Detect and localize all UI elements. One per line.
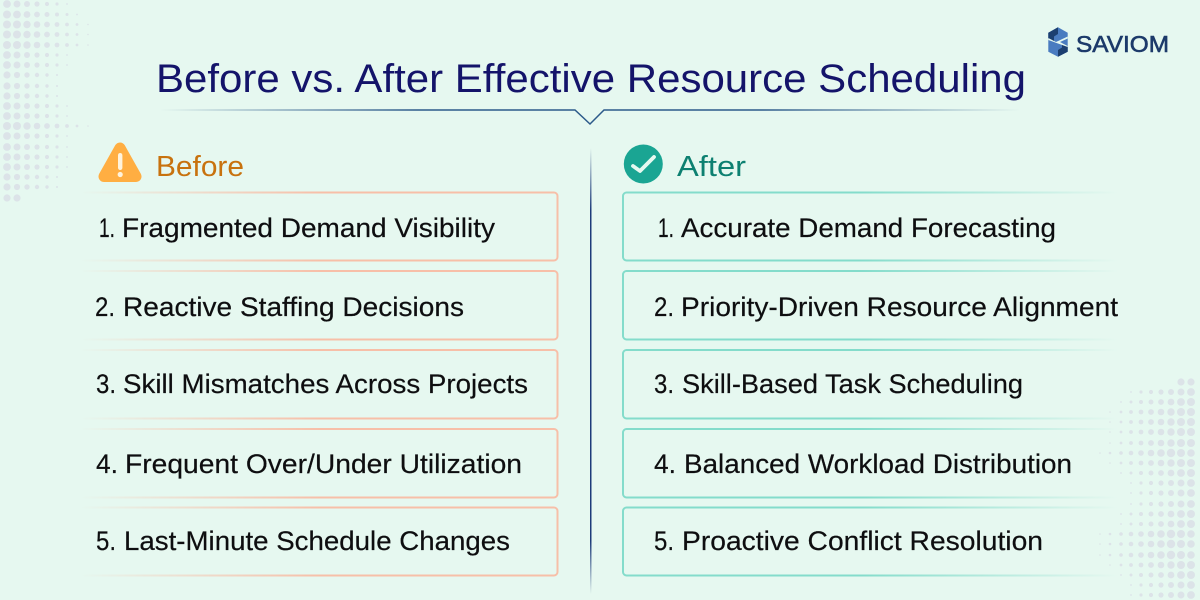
before item 2 xyxy=(80,271,558,340)
before item 1: Fragmented Demand Visibility xyxy=(122,213,496,243)
after item 3: Skill-Based Task Scheduling xyxy=(682,369,1023,399)
logo: Saviom xyxy=(1048,27,1169,57)
after item 4: Balanced Workload Distribution xyxy=(684,449,1072,479)
after item 4 xyxy=(623,429,1118,498)
before item 1 xyxy=(80,192,558,260)
icon: warning triangle xyxy=(104,148,136,177)
after item 1 xyxy=(623,192,1118,260)
icon: Saviom hexagon xyxy=(1048,27,1068,57)
after item 1: Accurate Demand Forecasting xyxy=(681,213,1056,243)
center divider xyxy=(590,148,592,594)
heading: before: Before xyxy=(156,151,244,183)
panel: before xyxy=(80,148,558,576)
before item 4: 4. xyxy=(96,449,118,479)
before item 3: 3. xyxy=(96,369,116,399)
halftone dots: top left xyxy=(3,0,89,202)
halftone dots: bottom right xyxy=(1099,378,1195,599)
after item 2 xyxy=(623,271,1119,340)
after item 3 xyxy=(623,350,1118,418)
after item 3: 3. xyxy=(654,369,674,399)
before item 1: 1. xyxy=(99,213,115,243)
before item 4 xyxy=(80,429,558,498)
after item 2: 2. xyxy=(654,292,674,322)
panel: after xyxy=(623,144,1119,576)
before item 5: Last-Minute Schedule Changes xyxy=(124,526,510,556)
heading: after: After xyxy=(677,151,746,183)
before item 3: Skill Mismatches Across Projects xyxy=(123,369,528,399)
before item 2: 2. xyxy=(95,292,115,322)
after item 2: Priority-Driven Resource Alignment xyxy=(681,292,1119,322)
title: Before vs. After Effective Resource Scheduling xyxy=(156,57,1026,101)
before item 3 xyxy=(80,350,558,418)
before item 4: Frequent Over/Under Utilization xyxy=(125,449,522,479)
after item 4: 4. xyxy=(654,449,676,479)
before item 5 xyxy=(80,508,558,576)
title underline with notch xyxy=(160,110,1020,124)
before item 2: Reactive Staffing Decisions xyxy=(123,292,464,322)
icon: check circle xyxy=(624,144,663,184)
after item 5 xyxy=(623,508,1118,576)
before item 5: 5. xyxy=(96,526,116,556)
logo wordmark: SAVIOM xyxy=(1076,31,1169,57)
after item 5: 5. xyxy=(654,526,674,556)
after item 5: Proactive Conflict Resolution xyxy=(682,526,1043,556)
after item 1: 1. xyxy=(658,213,674,243)
